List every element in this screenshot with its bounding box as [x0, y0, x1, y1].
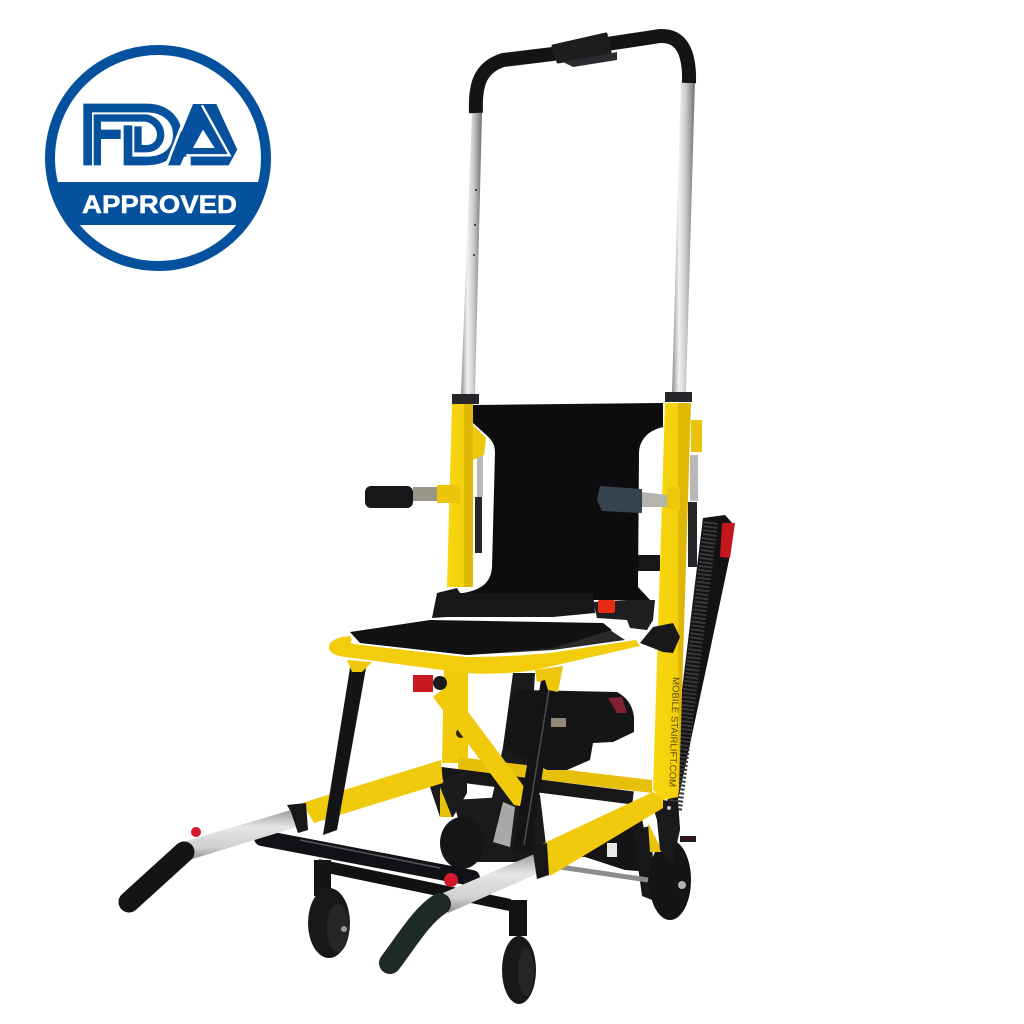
FDA logo: [88, 101, 237, 168]
stair chair: [129, 34, 735, 1004]
rear cross bars: [437, 757, 652, 798]
seat cushion: [350, 620, 612, 655]
back cushion: [463, 403, 663, 600]
red reflector: [720, 523, 735, 558]
right pull handle: [390, 904, 440, 963]
red latch: [413, 675, 447, 692]
top handle: [476, 34, 689, 113]
seat tube: [329, 636, 640, 674]
rear slide rails: [475, 453, 698, 571]
leg mounts: [347, 660, 563, 692]
right bracket: [691, 420, 702, 452]
belt buckle: [593, 600, 655, 630]
cross brace: [433, 685, 525, 806]
lower mechanism: [430, 770, 657, 902]
seat pan: [362, 625, 625, 655]
right stair track: [664, 515, 735, 830]
footrest tubes: [262, 838, 510, 905]
right upright: [653, 403, 691, 800]
rear wheel: [649, 840, 691, 920]
left yellow side bar: [302, 760, 443, 823]
left armrest: [365, 485, 460, 508]
upright caps: [452, 392, 692, 404]
left bracket: [473, 425, 486, 460]
rear track behind motor: [483, 673, 535, 850]
badge text: APPROVED: [82, 191, 237, 219]
brand text on upright: MOBILE STAIRLIFT.COM: [666, 677, 681, 787]
belt strap: [640, 623, 680, 653]
knob on upright: [456, 728, 466, 738]
telescoping tubes: [461, 80, 695, 394]
lap belt: [432, 588, 595, 618]
left pull handle: [129, 852, 184, 902]
motor battery unit: [503, 690, 634, 770]
right front leg: [513, 680, 556, 852]
right caster: [502, 900, 536, 1004]
upper left upright: [447, 403, 473, 587]
left front leg: [323, 668, 366, 835]
left caster: [308, 860, 350, 958]
rear bracket plate: [648, 800, 696, 865]
right armrest: [597, 486, 680, 513]
right extension arm: [443, 843, 549, 913]
left extension arm: [183, 803, 308, 860]
axle rod: [560, 867, 648, 880]
right yellow front bar: [538, 792, 663, 876]
lower left upright: [442, 665, 468, 763]
FDA approved badge: [50, 50, 266, 266]
badge band: [54, 182, 262, 225]
